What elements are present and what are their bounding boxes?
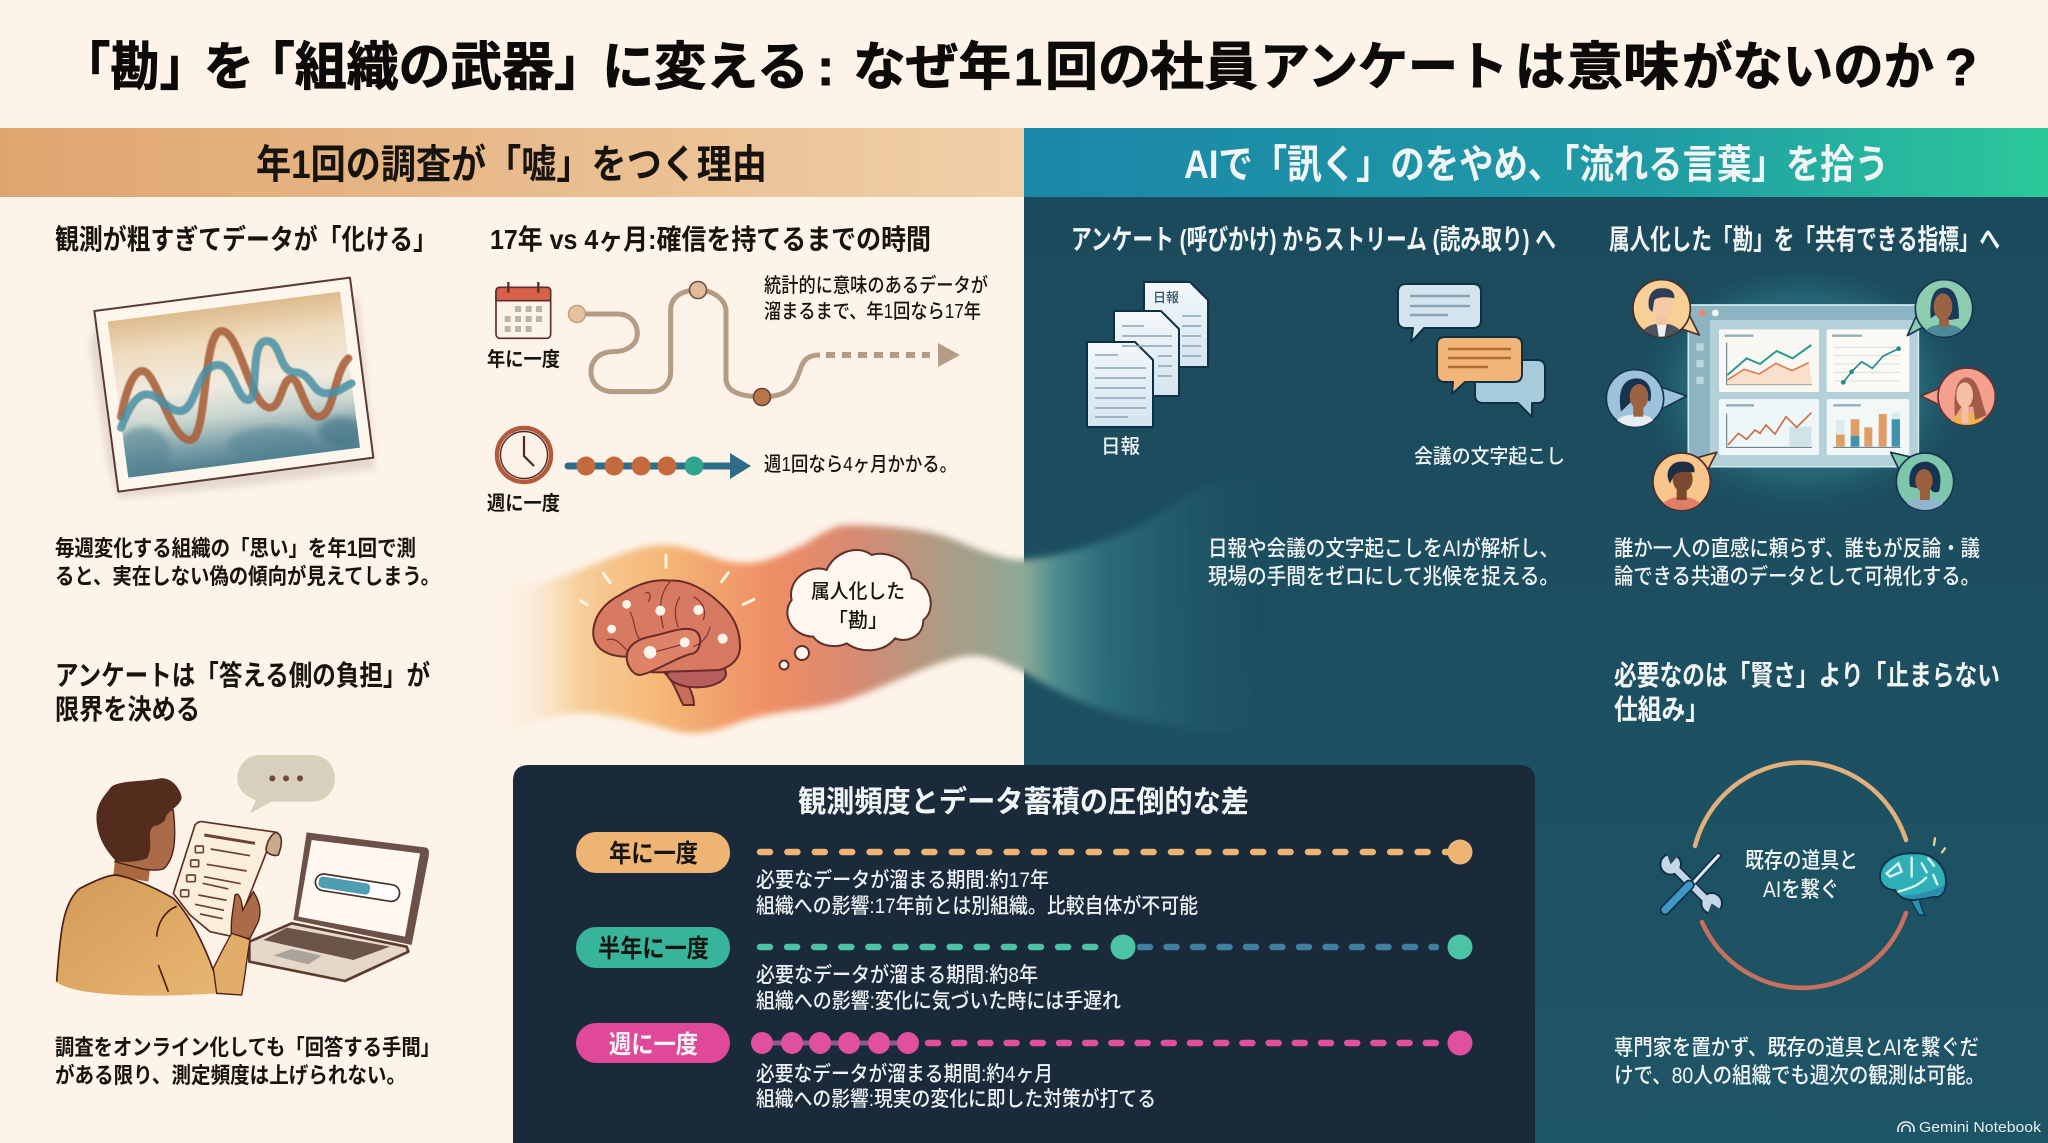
text: 4 months: 週1回なら4ヶ月かかる。 — [764, 453, 957, 476]
avatar: woman salmon — [1921, 368, 1995, 427]
icon: chat bubbles — [1398, 284, 1545, 417]
winding route — [568, 282, 960, 406]
icon: laptop — [249, 832, 429, 981]
heading: non-stop mechanism — [1614, 660, 2000, 725]
panel: right dark background — [1024, 197, 2048, 1143]
illustration: brain — [581, 555, 754, 705]
text: stream body — [1208, 536, 1559, 589]
loop label: AIを繋ぐ — [1763, 877, 1839, 902]
avatar: woman green — [1907, 280, 1973, 338]
title — [61, 39, 1977, 97]
row: yearly — [576, 832, 1472, 918]
icon: speech bubble — [237, 755, 335, 813]
label: yearly: 年に一度 — [487, 348, 560, 371]
text: 17 years: 統計的に意味のあるデータが — [764, 273, 988, 297]
icon: documents — [1087, 282, 1208, 427]
text: respondent burden body — [55, 1035, 440, 1088]
row: yearly: 組織への影響:17年前とは別組織。比較自体が不可能 — [756, 895, 1198, 918]
timeline: weekly straight path — [487, 428, 957, 515]
heading: respondent burden: アンケートは「答える側の負担」が — [55, 659, 430, 691]
avatar: man in suit — [1633, 280, 1699, 338]
flowing wave band — [495, 479, 1320, 738]
panel: frequency comparison — [513, 765, 1535, 1143]
icon: calendar — [496, 282, 551, 338]
timeline: yearly winding path — [487, 273, 988, 406]
text: shared metric body: 論できる共通のデータとして可視化する。 — [1614, 564, 1980, 589]
heading: 17 years vs 4 months: 17年 vs 4ヶ月:確信を持てるまでの時間 — [490, 224, 931, 255]
person figure — [57, 778, 260, 996]
row: weekly — [576, 1023, 1472, 1111]
chart illustration: tilted picture — [90, 278, 375, 498]
heading: data distortion: 観測が粗すぎてデータが「化ける」 — [55, 223, 437, 255]
row: weekly: 必要なデータが溜まる期間:約4ヶ月 — [756, 1062, 1053, 1086]
illustration: person answering survey — [57, 755, 429, 996]
header: left band — [0, 128, 1024, 197]
title: を — [204, 39, 254, 97]
row: yearly: 年に一度 — [609, 840, 698, 868]
illustration: dashboard with people — [1606, 257, 1995, 517]
thought bubble: 属人化した — [811, 580, 905, 603]
icon: documents: 日報 — [1153, 290, 1179, 305]
avatar: woman blue — [1606, 370, 1687, 428]
title: 回の — [1045, 39, 1151, 97]
header: right band: AIで「訊く」のをやめ、「流れる言葉」を拾う — [1184, 143, 1889, 187]
text: shared metric body: 誰か一人の直感に頼らず、誰もが反論・議 — [1614, 536, 1980, 561]
text: data distortion body — [55, 536, 440, 589]
text: stream body: 日報や会議の文字起こしをAIが解析し、 — [1208, 536, 1559, 561]
heading: respondent burden — [55, 659, 430, 725]
dashboard window — [1688, 305, 1918, 467]
text: respondent burden body: 調査をオンライン化しても「回答する手間」 — [55, 1035, 440, 1060]
label: daily report: 日報 — [1101, 435, 1140, 458]
thought bubble — [780, 550, 931, 670]
header: right band — [1024, 128, 2048, 197]
row: half-yearly: 半年に一度 — [598, 935, 709, 963]
text: non-stop body: けで、80人の組織でも週次の観測は可能。 — [1614, 1063, 1985, 1088]
title: 「組織の武器」 — [243, 39, 606, 97]
diagram: connection loop — [1659, 763, 1946, 988]
watermark: Gemini Notebook — [1919, 1119, 2042, 1136]
icon: wrench and screwdriver — [1659, 848, 1723, 918]
text: 17 years: 溜まるまで、年1回なら17年 — [764, 300, 981, 323]
text: data distortion body: 毎週変化する組織の「思い」を年1回で測 — [55, 536, 416, 561]
row: weekly: 組織への影響:現実の変化に即した対策が打てる — [756, 1088, 1156, 1111]
title: アンケート — [1260, 39, 1508, 97]
avatar: woman teal — [1891, 452, 1954, 512]
icon: clock — [497, 428, 551, 482]
icon: teal brain — [1880, 838, 1946, 915]
title: ? — [1945, 39, 1977, 97]
icon: survey paper — [173, 822, 281, 937]
text: non-stop body — [1614, 1035, 1985, 1088]
row: half-yearly: 組織への影響:変化に気づいた時には手遅れ — [756, 990, 1121, 1013]
loop label — [1745, 848, 1858, 902]
text: 17 years — [764, 273, 988, 323]
thought bubble: 「勘」 — [828, 609, 888, 632]
heading: respondent burden: 限界を決める — [55, 694, 200, 725]
dotted arrow — [568, 453, 751, 479]
text: shared metric body — [1614, 536, 1980, 589]
row: half-yearly: 必要なデータが溜まる期間:約8年 — [756, 963, 1038, 987]
text: non-stop body: 専門家を置かず、既存の道具とAIを繋ぐだ — [1614, 1035, 1979, 1060]
title: 社員 — [1150, 39, 1258, 97]
title: 1 — [1014, 39, 1042, 97]
row: yearly: 必要なデータが溜まる期間:約17年 — [756, 868, 1049, 892]
title: : — [817, 39, 834, 97]
row: half-yearly — [576, 927, 1472, 1013]
title: 意味 — [1567, 39, 1679, 97]
text: stream body: 現場の手間をゼロにして兆候を捉える。 — [1208, 564, 1559, 589]
title: 「勘」 — [61, 39, 209, 97]
text: respondent burden body: がある限り、測定頻度は上げられない。 — [55, 1063, 406, 1088]
title: に変える — [602, 39, 809, 97]
header: left band: 年1回の調査が「嘘」をつく理由 — [256, 143, 767, 187]
label: transcripts: 会議の文字起こし — [1414, 445, 1565, 468]
row: weekly: 週に一度 — [609, 1031, 698, 1059]
panel heading: 観測頻度とデータ蓄積の圧倒的な差 — [798, 785, 1249, 819]
title: なぜ年 — [853, 39, 1011, 97]
loop label: 既存の道具と — [1745, 848, 1858, 873]
title: がないのか — [1682, 39, 1934, 97]
label: weekly: 週に一度 — [487, 492, 560, 515]
heading: stream: アンケート (呼びかけ) からストリーム (読み取り) へ — [1071, 224, 1556, 255]
text: data distortion body: ると、実在しない偽の傾向が見えてしまう。 — [55, 564, 440, 589]
avatar: man orange — [1653, 452, 1717, 512]
heading: non-stop mechanism: 仕組み」 — [1614, 694, 1709, 725]
title: は — [1515, 39, 1565, 97]
